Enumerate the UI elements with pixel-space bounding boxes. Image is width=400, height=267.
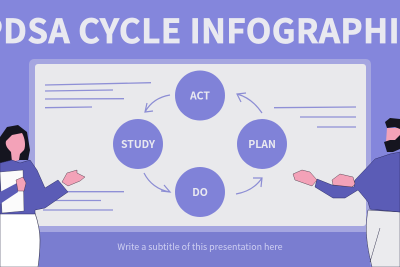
arrow: do to plan — [236, 178, 262, 194]
arrow: plan to act — [237, 93, 262, 113]
subtitle: Write a subtitle of this presentation here — [117, 240, 283, 253]
cycle step: DO: DO — [192, 185, 208, 200]
text lines: bottom left — [43, 192, 124, 210]
cycle step: STUDY — [113, 119, 163, 169]
cycle step: ACT: ACT — [189, 88, 210, 104]
cycle step: PLAN: PLAN — [248, 137, 276, 152]
cycle step: DO — [175, 167, 225, 217]
arrow: study to do — [144, 173, 170, 192]
cycle step: ACT — [175, 70, 225, 120]
cycle step: STUDY: STUDY — [121, 137, 156, 152]
text lines: right — [274, 107, 356, 127]
text lines: top left — [45, 83, 151, 108]
panel: presentation board — [29, 59, 371, 267]
arrow: act to study — [145, 95, 170, 112]
illustration: man presenter — [293, 118, 400, 267]
illustration: woman presenter — [0, 125, 85, 267]
cycle step: PLAN — [237, 119, 287, 169]
